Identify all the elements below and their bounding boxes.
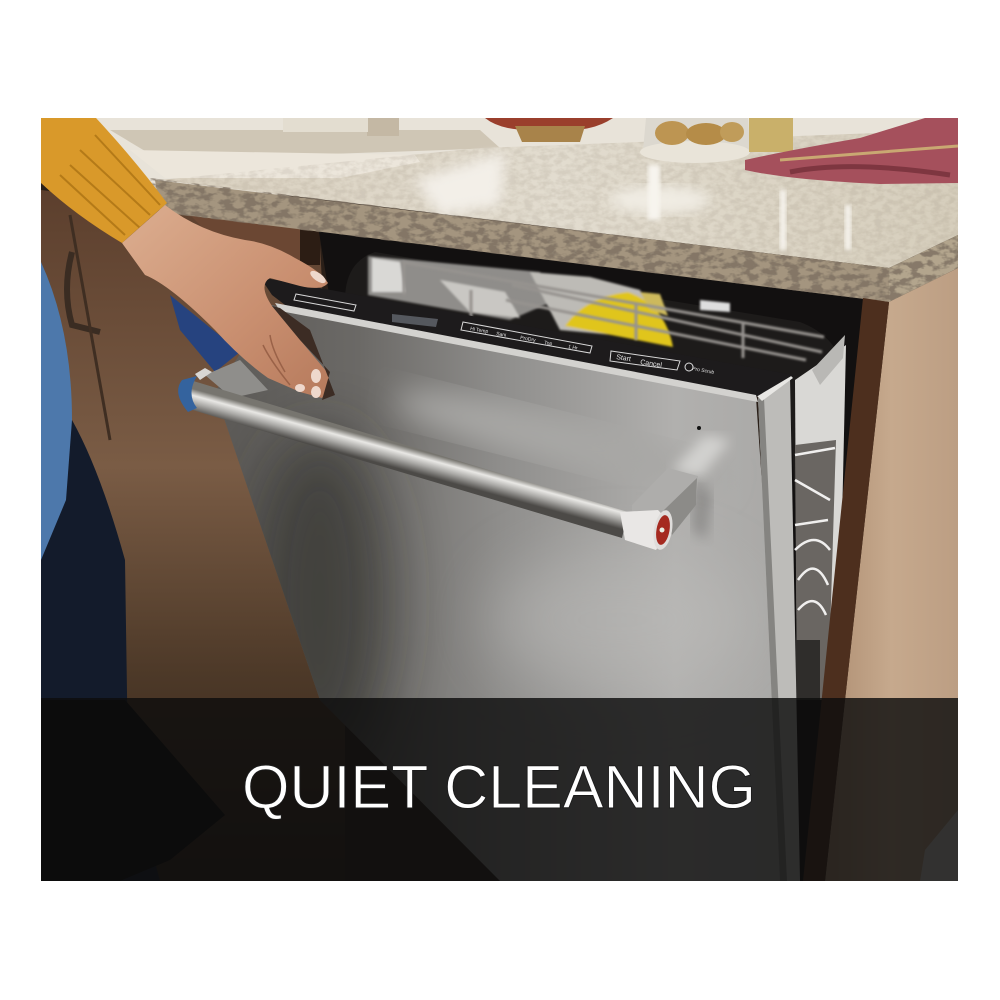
handle bar [178, 360, 698, 551]
handle post [676, 470, 698, 501]
dark opening around tub [319, 232, 863, 671]
door sensor dot [697, 426, 701, 430]
right cabinet side [803, 268, 958, 881]
panel labels: Sani [496, 331, 507, 339]
dishwasher interior racks [345, 252, 846, 700]
countertop [110, 118, 958, 302]
hand and sleeve [41, 118, 335, 400]
background kitchen behind counter [96, 118, 925, 196]
door right edge [758, 378, 800, 881]
panel labels: 1 Hr [568, 344, 578, 352]
panel labels: Start [616, 354, 631, 363]
countertop items [283, 118, 958, 184]
panel labels: Top [544, 340, 553, 347]
dark caption band [41, 698, 958, 881]
dishwasher door [215, 305, 800, 881]
panel labels [470, 326, 715, 376]
photo: dishwasher in kitchen island [41, 118, 958, 881]
panel labels: ProDry [520, 335, 537, 344]
left wood cabinet [41, 190, 322, 698]
jeans [41, 262, 225, 881]
panel labels: Pro Scrub [692, 366, 715, 376]
panel labels: Hi Temp [470, 326, 489, 335]
caption: QUIET CLEANING: QUIET CLEANING [242, 753, 756, 821]
panel labels: Cancel [640, 359, 663, 369]
control panel [260, 277, 793, 402]
